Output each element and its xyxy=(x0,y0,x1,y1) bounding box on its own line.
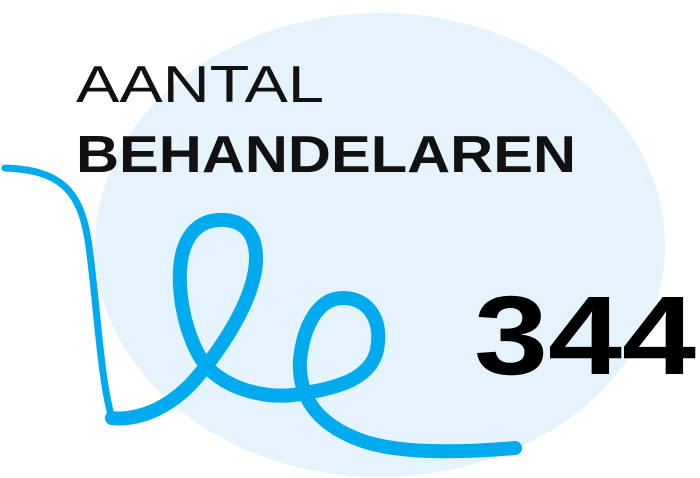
squiggle line xyxy=(5,168,515,451)
number: 344 xyxy=(474,273,696,398)
heading line 1: AANTAL xyxy=(76,56,324,114)
heading line 2: BEHANDELAREN xyxy=(76,126,576,184)
background ellipse xyxy=(95,13,665,477)
